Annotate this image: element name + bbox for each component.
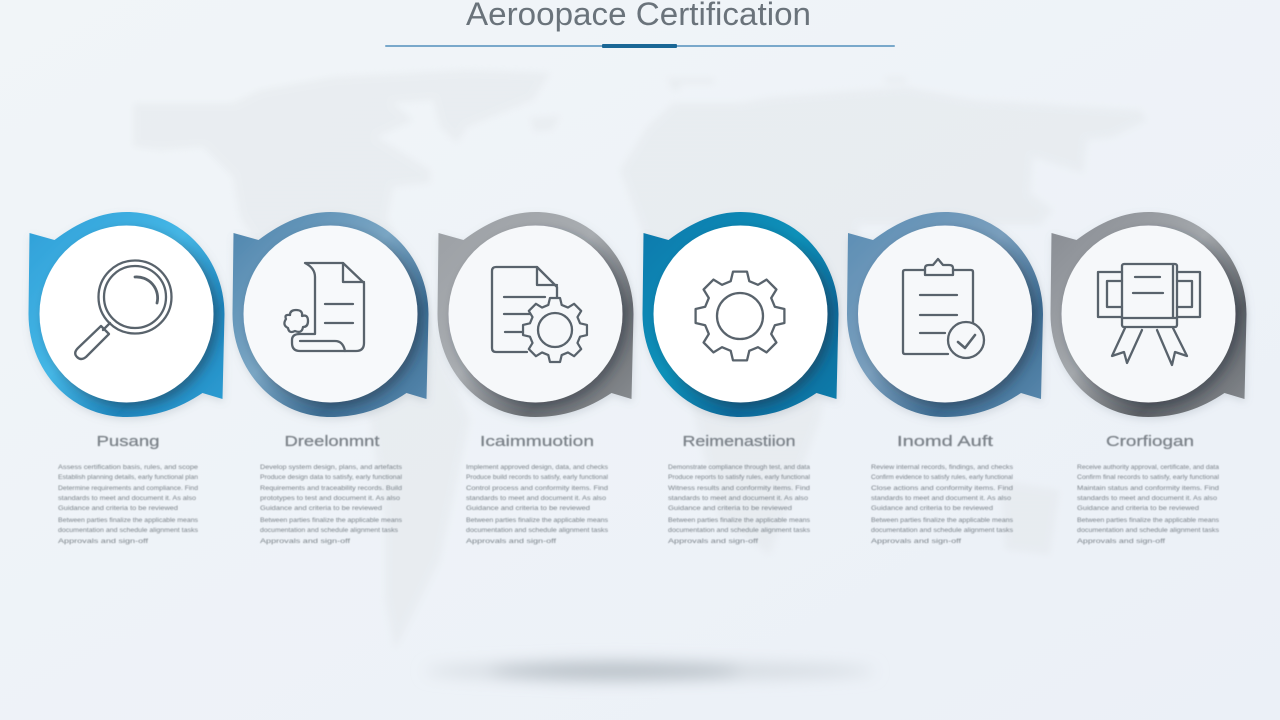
body text: Requirements and traceability records. Build — [260, 485, 402, 492]
body text: Produce reports to satisfy rules, early functional — [668, 474, 811, 481]
body text: Approvals and sign-off — [58, 538, 148, 545]
body text: Approvals and sign-off — [260, 538, 350, 545]
body text: Confirm final records to satisfy, early functional — [1077, 474, 1220, 481]
body text: Between parties finalize the applicable means — [1077, 517, 1220, 524]
body text: Guidance and criteria to be reviewed — [58, 505, 178, 512]
icon: magnifying glass — [75, 260, 172, 359]
body text: Between parties finalize the applicable means — [668, 517, 811, 524]
heading: Pusang — [96, 433, 160, 450]
body text: documentation and schedule alignment tasks — [1077, 527, 1220, 534]
body text: Witness results and conformity items. Find — [668, 485, 810, 492]
body text: Implement approved design, data, and checks — [466, 464, 609, 471]
step 6: Certification — [1050, 212, 1246, 545]
body text: documentation and schedule alignment tasks — [871, 527, 1014, 534]
icon: clipboard with check — [903, 259, 984, 358]
body text — [58, 464, 199, 545]
body text: Approvals and sign-off — [871, 538, 961, 545]
body text: Between parties finalize the applicable means — [871, 517, 1014, 524]
body text — [466, 464, 609, 545]
body text: Produce design data to satisfy, early functional — [260, 474, 403, 481]
body text: Maintain status and conformity items. Find — [1077, 485, 1219, 492]
body text: standards to meet and document it. As also — [58, 495, 196, 502]
body text: Between parties finalize the applicable means — [260, 517, 403, 524]
icon: scroll document — [284, 263, 364, 351]
body text — [668, 464, 811, 545]
body text: documentation and schedule alignment tasks — [668, 527, 811, 534]
body text: Establish planning details, early functional plan — [58, 474, 198, 481]
badge 6 — [1050, 212, 1246, 417]
step 2: Development — [232, 212, 428, 545]
body text: Assess certification basis, rules, and scope — [58, 464, 198, 471]
heading: Inomd Auft — [897, 433, 994, 450]
body text: Guidance and criteria to be reviewed — [466, 505, 590, 512]
body text: documentation and schedule alignment tasks — [260, 527, 399, 534]
body text: Review internal records, findings, and checks — [871, 464, 1014, 471]
body text: Receive authority approval, certificate, and data — [1077, 464, 1219, 471]
body text: Develop system design, plans, and artefacts — [260, 464, 403, 471]
body text: documentation and schedule alignment tasks — [466, 527, 609, 534]
badge 2 — [232, 212, 428, 417]
body text: Between parties finalize the applicable means — [466, 517, 609, 524]
step 5: Internal Audit — [847, 212, 1043, 545]
body text: standards to meet and document it. As also — [466, 495, 606, 502]
body text: Confirm evidence to satisfy rules, early functional — [871, 474, 1014, 481]
icon: certificate with ribbons — [1098, 264, 1200, 365]
body text: Control process and conformity items. Find — [466, 485, 608, 492]
body text: Between parties finalize the applicable means — [58, 517, 199, 524]
body text: Demonstrate compliance through test, and data — [668, 464, 810, 471]
floor shadow — [425, 662, 875, 680]
body text: standards to meet and document it. As also — [871, 495, 1011, 502]
badge 5 — [847, 212, 1043, 417]
title underline — [385, 44, 895, 48]
body text — [260, 464, 403, 545]
heading: Reimenastiion — [682, 433, 796, 450]
heading: Crorfiogan — [1106, 433, 1194, 450]
badge 1 — [28, 212, 224, 417]
heading: Dreelonmnt — [284, 433, 381, 450]
body text — [871, 464, 1014, 545]
step 4: Demonstration — [642, 212, 838, 545]
icon: gear — [696, 272, 784, 360]
body text: Guidance and criteria to be reviewed — [1077, 505, 1199, 512]
badge 4 — [642, 212, 838, 417]
body text: Guidance and criteria to be reviewed — [871, 505, 993, 512]
body text: prototypes to test and document it. As also — [260, 495, 400, 502]
step 1: Planning — [28, 212, 224, 545]
body text: Approvals and sign-off — [1077, 538, 1165, 545]
body text: Determine requirements and compliance. Find — [58, 485, 198, 492]
body text: Approvals and sign-off — [668, 538, 758, 545]
world map — [133, 70, 1147, 650]
icon: document with gear — [492, 267, 587, 362]
heading: Icaimmuotion — [480, 433, 594, 450]
body text: Guidance and criteria to be reviewed — [260, 505, 382, 512]
body text: Approvals and sign-off — [466, 538, 556, 545]
body text: standards to meet and document it. As also — [1077, 495, 1217, 502]
body text: Produce build records to satisfy, early functional — [466, 474, 609, 481]
step 3: Implementation — [438, 212, 634, 545]
body text — [1077, 464, 1220, 545]
body text: Guidance and criteria to be reviewed — [668, 505, 792, 512]
badge 3 — [438, 212, 634, 417]
body text: Close actions and conformity items. Find — [871, 485, 1013, 492]
body text: documentation and schedule alignment tasks — [58, 527, 199, 534]
body text: standards to meet and document it. As also — [668, 495, 808, 502]
